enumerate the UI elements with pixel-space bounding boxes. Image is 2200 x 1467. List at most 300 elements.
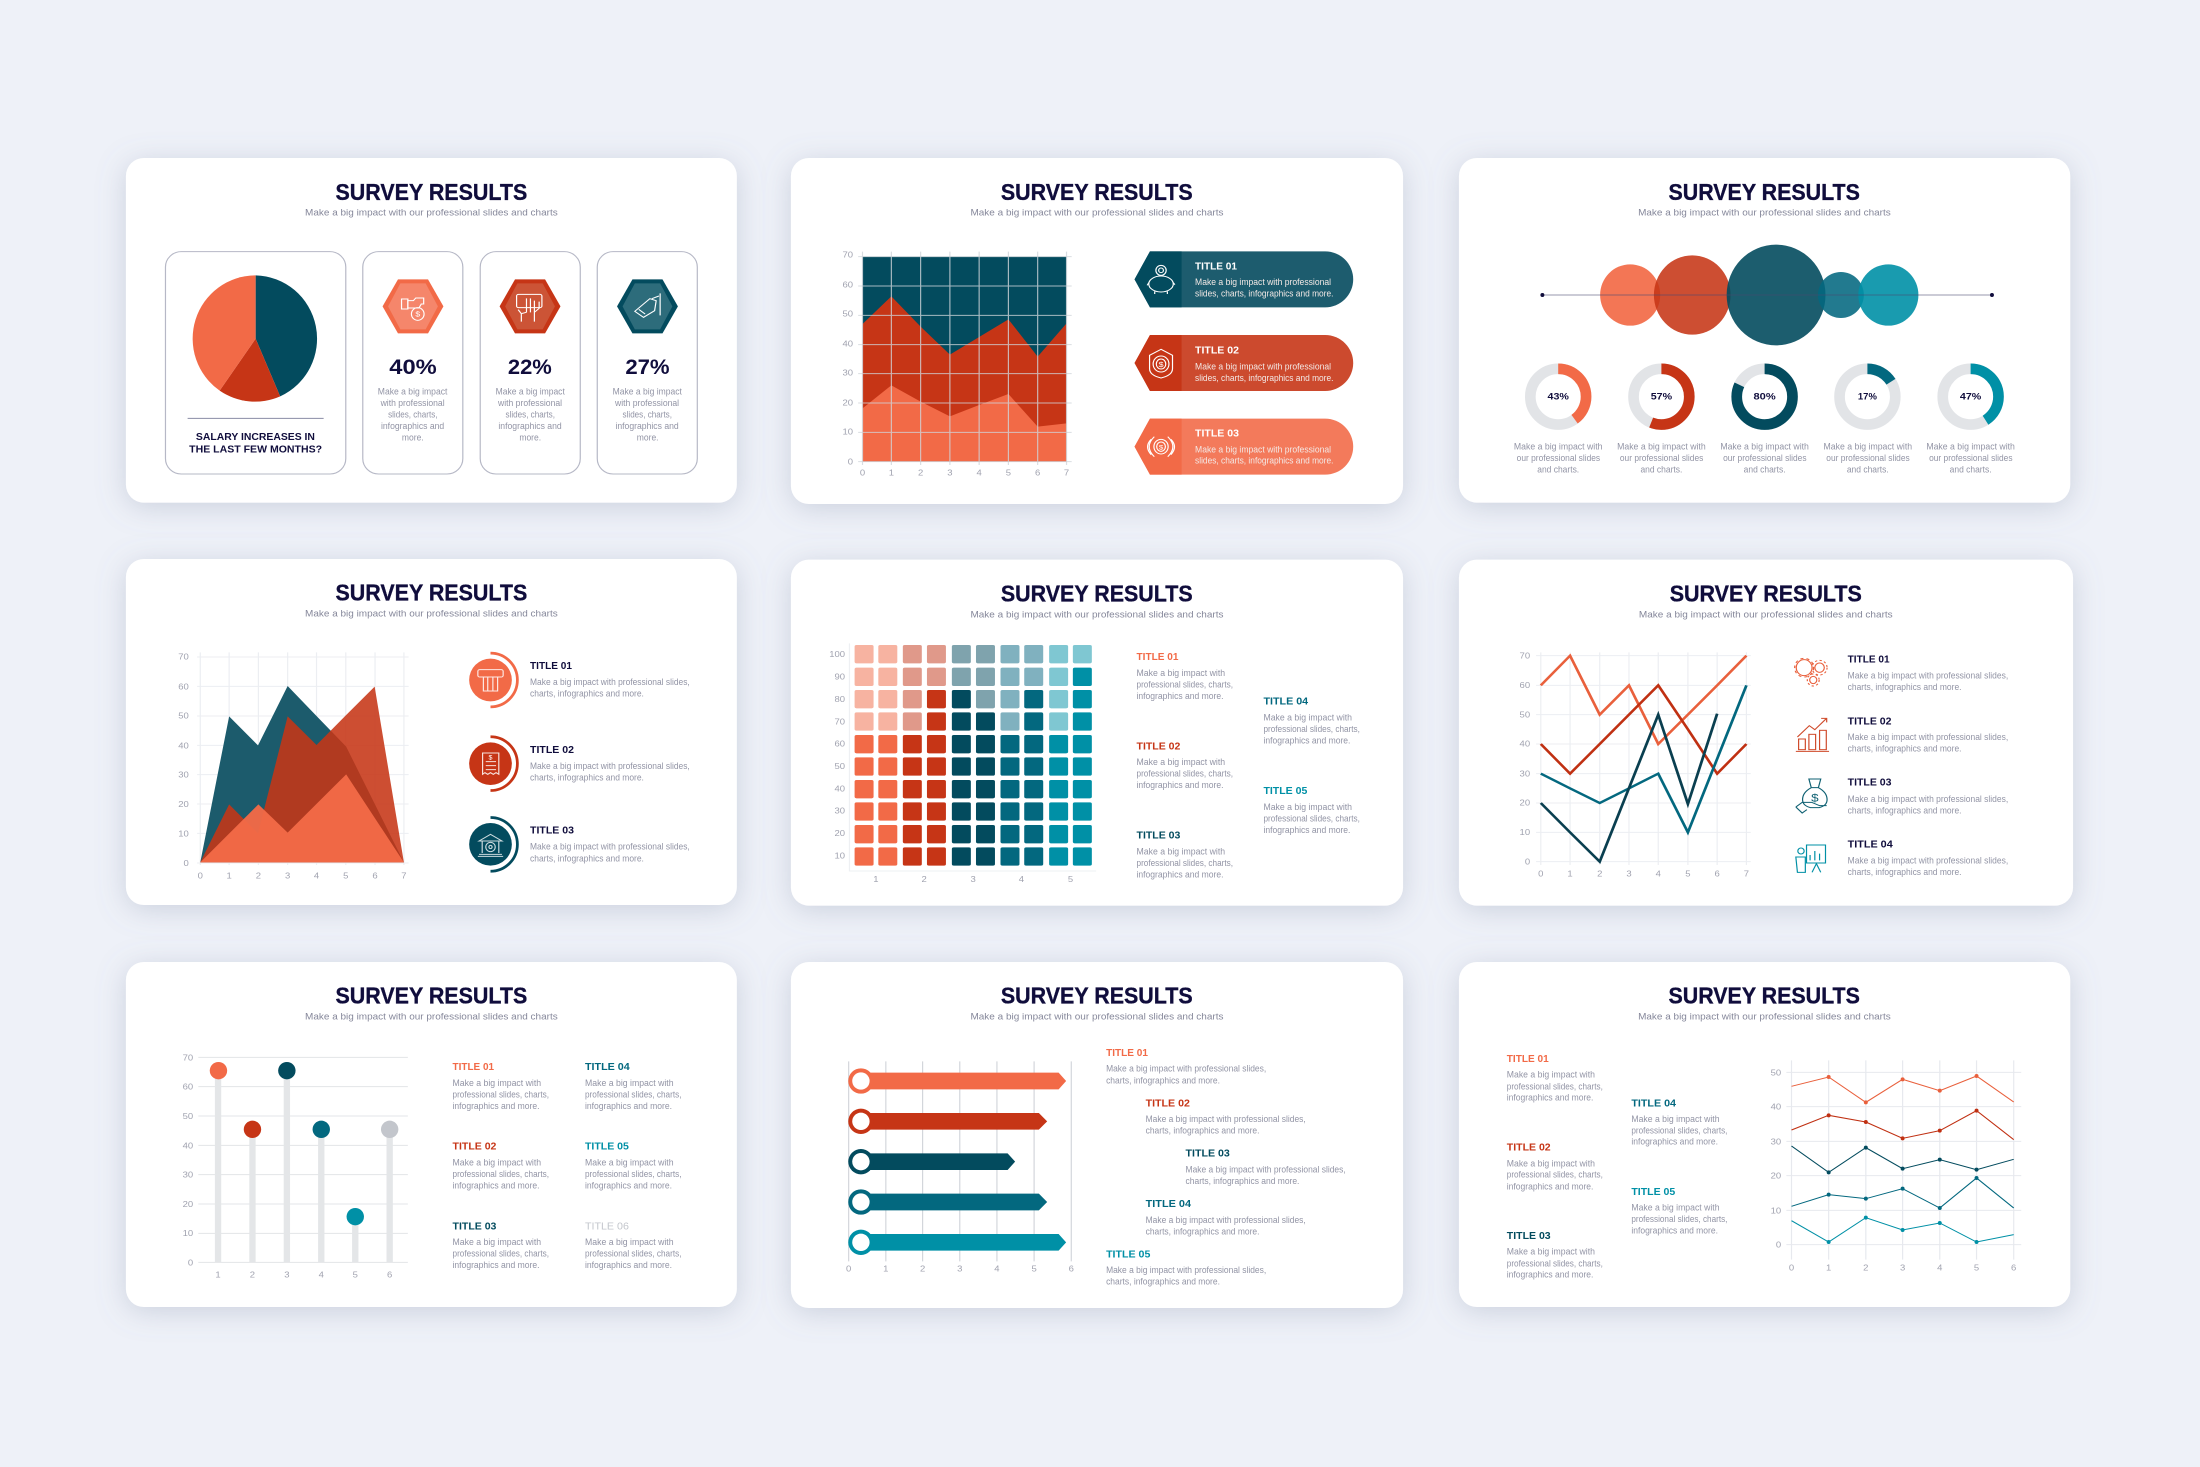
lollipop chart: 2 bbox=[250, 1270, 255, 1279]
text: title 03: Make a big impact with professional slides, bbox=[1186, 1165, 1346, 1175]
card background bbox=[791, 158, 1403, 504]
overlapping area chart: 6 bbox=[372, 871, 378, 880]
lollipop chart: 5 bbox=[353, 1270, 358, 1279]
stat card 22% bbox=[480, 252, 580, 474]
text: title 03 bbox=[453, 1221, 549, 1271]
text: title 05: professional slides, charts, bbox=[585, 1170, 681, 1180]
icon: shield with dollar bbox=[1150, 349, 1173, 378]
heatmap chart: 2 bbox=[922, 875, 927, 884]
arrow bar chart bbox=[846, 1061, 1074, 1273]
text: title 02: infographics and more. bbox=[1137, 781, 1224, 791]
text: title 02: infographics and more. bbox=[453, 1181, 540, 1191]
text: title 01: infographics and more. bbox=[1507, 1093, 1593, 1103]
text: title 05: infographics and more. bbox=[1263, 826, 1350, 836]
text: title 02: infographics and more. bbox=[1507, 1182, 1593, 1192]
text: title 03 bbox=[1186, 1148, 1346, 1187]
item: title 02: TITLE 02 bbox=[530, 745, 574, 756]
text: title 03: TITLE 03 bbox=[1186, 1148, 1230, 1159]
text: title 01: infographics and more. bbox=[453, 1102, 540, 1112]
text: title 02: Make a big impact with bbox=[453, 1158, 541, 1168]
icon: gears bbox=[1795, 658, 1827, 686]
item: title 02: $ bbox=[489, 755, 493, 761]
text: title 02: TITLE 02 bbox=[453, 1141, 496, 1152]
donut 47%: and charts. bbox=[1950, 465, 1992, 475]
icon: hand and card bbox=[500, 279, 560, 333]
heatmap chart: 100 bbox=[829, 650, 845, 659]
donut 57%: Make a big impact with bbox=[1617, 442, 1706, 452]
item: title 03: TITLE 03 bbox=[530, 825, 574, 836]
item: title 01: TITLE 01 bbox=[530, 661, 572, 672]
line chart with markers: 0 bbox=[1789, 1263, 1794, 1272]
line chart with markers: 4 bbox=[1937, 1263, 1943, 1272]
icon: hand and money bag: $ bbox=[415, 310, 421, 318]
pill: title 01: TITLE 01 bbox=[1195, 261, 1237, 272]
item: title 02 bbox=[1796, 716, 2008, 754]
subtitle: Make a big impact with our professional slides and charts bbox=[305, 208, 558, 218]
text: title 05: charts, infographics and more. bbox=[1106, 1277, 1220, 1287]
heatmap chart: 90 bbox=[835, 672, 845, 681]
card background bbox=[1459, 962, 2070, 1307]
text: title 01: TITLE 01 bbox=[1507, 1054, 1549, 1065]
text: title 03: infographics and more. bbox=[1507, 1270, 1593, 1280]
item: title 03: TITLE 03 bbox=[1848, 777, 1892, 788]
donut 47% bbox=[1926, 369, 2015, 475]
donut 57%: 57% bbox=[1651, 392, 1672, 402]
heatmap chart: 4 bbox=[1019, 875, 1024, 884]
text: title 06 bbox=[585, 1221, 681, 1271]
card background bbox=[126, 559, 737, 905]
overlapping area chart: 30 bbox=[178, 770, 189, 779]
text: title 04: TITLE 04 bbox=[585, 1062, 630, 1073]
line chart: 2 bbox=[1597, 869, 1602, 878]
item: title 04 bbox=[1796, 839, 2008, 878]
lollipop chart: 10 bbox=[183, 1229, 193, 1238]
item: title 01: charts, infographics and more. bbox=[530, 689, 644, 699]
heatmap chart: 10 bbox=[835, 851, 845, 860]
text: title 03: professional slides, charts, bbox=[453, 1249, 549, 1259]
item: title 02: Make a big impact with professional slides, bbox=[1848, 733, 2008, 743]
line chart: 1 bbox=[1567, 869, 1573, 878]
line chart: 6 bbox=[1715, 869, 1720, 878]
text: title 04: infographics and more. bbox=[585, 1102, 672, 1112]
stacked area chart: 40 bbox=[842, 339, 853, 348]
donut 43%: 43% bbox=[1548, 392, 1569, 402]
text: title 03: professional slides, charts, bbox=[1507, 1259, 1603, 1269]
text: title 01: infographics and more. bbox=[1137, 692, 1224, 702]
text: title 06: professional slides, charts, bbox=[585, 1249, 681, 1259]
text: title 01: professional slides, charts, bbox=[1507, 1082, 1603, 1092]
pill: title 02: $ bbox=[1159, 360, 1164, 369]
overlapping area chart bbox=[178, 652, 409, 880]
text: title 02: Make a big impact with professional slides, bbox=[1146, 1115, 1306, 1125]
text: title 01 bbox=[1507, 1054, 1603, 1103]
text: title 05 bbox=[1106, 1249, 1266, 1287]
text: title 02 bbox=[1146, 1098, 1306, 1136]
overlapping area chart: 60 bbox=[178, 682, 189, 691]
text: title 01: TITLE 01 bbox=[453, 1062, 494, 1073]
text: title 03: TITLE 03 bbox=[1137, 830, 1180, 841]
value: 22% bbox=[508, 355, 552, 379]
heading: SURVEY RESULTS bbox=[335, 983, 527, 1009]
line chart: 0 bbox=[1525, 857, 1530, 866]
lollipop chart: 3 bbox=[284, 1270, 290, 1279]
lollipop chart bbox=[183, 1053, 408, 1279]
line chart: 60 bbox=[1520, 681, 1530, 690]
text: title 04: TITLE 04 bbox=[1146, 1199, 1192, 1210]
pill: title 02: TITLE 02 bbox=[1195, 345, 1239, 356]
heading: SURVEY RESULTS bbox=[1669, 180, 1860, 205]
item: title 03: Make a big impact with professional slides, bbox=[530, 842, 690, 852]
lollipop chart: 70 bbox=[183, 1053, 193, 1062]
item: title 01 bbox=[1795, 654, 2008, 693]
overlapping area chart: 10 bbox=[178, 829, 189, 838]
item: title 03: Make a big impact with professional slides, bbox=[1848, 795, 2008, 805]
pie question: THE LAST FEW MONTHS? bbox=[189, 444, 322, 455]
pill: title 02 bbox=[1135, 335, 1353, 391]
item: title 02: Make a big impact with professional slides, bbox=[530, 762, 690, 772]
text: title 01 bbox=[453, 1062, 549, 1112]
line chart: 50 bbox=[1520, 710, 1530, 719]
subtitle: Make a big impact with our professional slides and charts bbox=[970, 610, 1224, 620]
text: title 01: Make a big impact with bbox=[1137, 669, 1225, 679]
donut 17% bbox=[1824, 369, 1912, 475]
pill: title 03: slides, charts, infographics and more. bbox=[1195, 456, 1333, 466]
text: title 01: TITLE 01 bbox=[1137, 652, 1178, 663]
item: title 01: Make a big impact with professional slides, bbox=[530, 678, 690, 688]
text: title 03 bbox=[1137, 830, 1233, 880]
arrow bar chart: 1 bbox=[883, 1264, 889, 1273]
panel: lollipop chart bbox=[126, 962, 737, 1307]
icon: piggy bank bbox=[1147, 265, 1175, 294]
text: title 03: TITLE 03 bbox=[453, 1221, 496, 1232]
line chart with markers: 40 bbox=[1771, 1102, 1781, 1111]
item: title 03: $ bbox=[1811, 792, 1819, 804]
stacked area chart: 60 bbox=[842, 280, 853, 289]
lollipop chart: 30 bbox=[183, 1170, 193, 1179]
line chart: 0 bbox=[1538, 869, 1544, 878]
line chart with markers: 50 bbox=[1771, 1068, 1781, 1077]
text: title 01: professional slides, charts, bbox=[453, 1090, 549, 1100]
subtitle: Make a big impact with our professional slides and charts bbox=[1638, 1012, 1891, 1022]
text: title 05: professional slides, charts, bbox=[1263, 814, 1360, 824]
pie chart bbox=[193, 275, 317, 402]
card background bbox=[791, 962, 1403, 1308]
item: title 03 bbox=[469, 817, 690, 871]
text: title 05: Make a big impact with professional slides, bbox=[1106, 1266, 1266, 1276]
line chart: 10 bbox=[1520, 828, 1530, 837]
lollipop chart: 50 bbox=[183, 1112, 193, 1121]
pill: title 03 bbox=[1135, 419, 1353, 475]
description: Make a big impact bbox=[613, 387, 682, 397]
panel: heatmap grid bbox=[791, 560, 1403, 906]
panel: thin line chart with markers bbox=[1459, 962, 2070, 1307]
icon: bank bbox=[478, 834, 503, 856]
heatmap chart: 3 bbox=[971, 875, 976, 884]
item: title 01: TITLE 01 bbox=[1848, 654, 1890, 665]
stacked area chart: 6 bbox=[1035, 468, 1040, 477]
line chart: 5 bbox=[1685, 869, 1691, 878]
text: title 02: charts, infographics and more. bbox=[1146, 1126, 1259, 1136]
line chart with markers: 5 bbox=[1974, 1263, 1979, 1272]
description: slides, charts, bbox=[506, 410, 555, 420]
arrow bar chart: 6 bbox=[1069, 1264, 1074, 1273]
line chart: 3 bbox=[1626, 869, 1632, 878]
text: title 02: professional slides, charts, bbox=[1137, 769, 1233, 779]
arrow bar chart: 3 bbox=[957, 1264, 963, 1273]
line chart with markers: 3 bbox=[1900, 1263, 1905, 1272]
text: title 03: Make a big impact with bbox=[453, 1238, 541, 1248]
description: Make a big impact bbox=[496, 387, 565, 397]
description: with professional bbox=[380, 399, 445, 409]
line chart with markers bbox=[1771, 1060, 2021, 1272]
heading: SURVEY RESULTS bbox=[1001, 180, 1193, 205]
subtitle: Make a big impact with our professional slides and charts bbox=[1638, 208, 1891, 218]
overlapping area chart: 5 bbox=[343, 871, 349, 880]
description: more. bbox=[402, 433, 424, 443]
overlapping area chart: 0 bbox=[184, 859, 189, 868]
item: title 03: charts, infographics and more. bbox=[1848, 806, 1962, 816]
stacked area chart bbox=[842, 250, 1072, 477]
text: title 01: Make a big impact with bbox=[1507, 1070, 1595, 1080]
text: title 05: Make a big impact with bbox=[1263, 803, 1352, 813]
text: title 05: Make a big impact with bbox=[585, 1158, 674, 1168]
icon: receipt bbox=[483, 753, 499, 774]
text: title 02: TITLE 02 bbox=[1137, 741, 1180, 752]
heatmap chart: 30 bbox=[835, 806, 845, 815]
line chart with markers: 30 bbox=[1771, 1137, 1781, 1146]
text: title 03: infographics and more. bbox=[1137, 870, 1224, 880]
text: title 05 bbox=[1263, 786, 1360, 836]
line chart: 7 bbox=[1744, 869, 1749, 878]
heatmap chart: 70 bbox=[835, 717, 845, 726]
pill: title 01: slides, charts, infographics and more. bbox=[1195, 289, 1333, 299]
donut 80%: 80% bbox=[1754, 392, 1776, 402]
item: title 02: TITLE 02 bbox=[1848, 716, 1892, 727]
stacked area chart: 30 bbox=[842, 368, 853, 377]
donut 43%: our professional slides bbox=[1517, 454, 1600, 464]
text: title 02 bbox=[1137, 741, 1233, 791]
text: title 03 bbox=[1507, 1231, 1603, 1280]
description: with professional bbox=[497, 399, 562, 409]
pie question bbox=[189, 432, 322, 455]
panel: pie chart and percentages bbox=[126, 158, 737, 503]
text: title 04: TITLE 04 bbox=[1631, 1098, 1677, 1109]
line chart with markers: 2 bbox=[1863, 1263, 1869, 1272]
stacked area chart: 50 bbox=[842, 309, 853, 318]
bubble timeline bbox=[1540, 245, 1994, 345]
card background bbox=[1459, 560, 2073, 906]
overlapping area chart: 7 bbox=[401, 871, 407, 880]
donut 80%: Make a big impact with bbox=[1720, 442, 1809, 452]
stacked area chart: 2 bbox=[918, 468, 923, 477]
text: title 03: TITLE 03 bbox=[1507, 1231, 1551, 1242]
heatmap chart: 80 bbox=[835, 695, 845, 704]
text: title 04: infographics and more. bbox=[1631, 1137, 1718, 1147]
item: title 02: charts, infographics and more. bbox=[1848, 744, 1962, 754]
text: title 01 bbox=[1137, 652, 1233, 702]
stacked area chart: 3 bbox=[947, 468, 953, 477]
text: title 05: TITLE 05 bbox=[1263, 786, 1307, 797]
pill: title 03: $ bbox=[1159, 443, 1163, 451]
donut 57% bbox=[1617, 369, 1706, 475]
text: title 02: Make a big impact with bbox=[1137, 758, 1225, 768]
text: title 06: TITLE 06 bbox=[585, 1221, 629, 1232]
text: title 05: TITLE 05 bbox=[1631, 1187, 1675, 1198]
pill: title 01 bbox=[1135, 251, 1353, 307]
lollipop chart: 6 bbox=[387, 1270, 392, 1279]
text: title 04 bbox=[1263, 696, 1360, 746]
donut 80% bbox=[1720, 369, 1809, 475]
donut 43% bbox=[1514, 369, 1603, 475]
pill: title 03: TITLE 03 bbox=[1195, 428, 1239, 439]
heading: SURVEY RESULTS bbox=[1670, 582, 1862, 607]
text: title 04: Make a big impact with bbox=[1631, 1115, 1720, 1125]
stacked area chart: 10 bbox=[842, 427, 853, 436]
heatmap chart: 60 bbox=[835, 739, 845, 748]
stacked area chart: 1 bbox=[889, 468, 894, 477]
stacked area chart: 0 bbox=[860, 468, 865, 477]
line chart: 30 bbox=[1520, 769, 1530, 778]
text: title 04: professional slides, charts, bbox=[1263, 725, 1360, 735]
arrow bar chart: 2 bbox=[920, 1264, 925, 1273]
text: title 05: infographics and more. bbox=[585, 1181, 672, 1191]
heading: SURVEY RESULTS bbox=[1669, 983, 1860, 1009]
donut 47%: our professional slides bbox=[1929, 454, 2013, 464]
text: title 04: TITLE 04 bbox=[1263, 696, 1309, 707]
pill: title 01: Make a big impact with professional bbox=[1195, 278, 1331, 288]
arrow bar chart: 5 bbox=[1031, 1264, 1037, 1273]
pill: title 02: Make a big impact with professional bbox=[1195, 362, 1331, 372]
text: title 02: professional slides, charts, bbox=[1507, 1170, 1603, 1180]
text: title 04: infographics and more. bbox=[1263, 736, 1350, 746]
description: infographics and bbox=[381, 422, 444, 432]
overlapping area chart: 20 bbox=[178, 800, 189, 809]
heading: SURVEY RESULTS bbox=[335, 581, 527, 606]
heatmap chart: 1 bbox=[873, 875, 879, 884]
text: title 05: professional slides, charts, bbox=[1631, 1215, 1727, 1225]
text: title 04: charts, infographics and more. bbox=[1146, 1227, 1259, 1237]
stat card 40% bbox=[363, 252, 463, 474]
text: title 03: infographics and more. bbox=[453, 1261, 540, 1271]
subtitle: Make a big impact with our professional slides and charts bbox=[305, 609, 558, 619]
pie card bbox=[165, 252, 346, 474]
lollipop chart: 0 bbox=[188, 1258, 193, 1267]
overlapping area chart: 1 bbox=[226, 871, 232, 880]
text: title 04: Make a big impact with bbox=[1263, 713, 1352, 723]
lollipop chart: 40 bbox=[183, 1141, 193, 1150]
overlapping area chart: 3 bbox=[285, 871, 290, 880]
text: title 03: Make a big impact with bbox=[1137, 847, 1225, 857]
text: title 04: professional slides, charts, bbox=[585, 1090, 681, 1100]
overlapping area chart: 2 bbox=[256, 871, 261, 880]
overlapping area chart: 40 bbox=[178, 741, 189, 750]
description: more. bbox=[637, 433, 659, 443]
card background bbox=[126, 962, 737, 1307]
card background bbox=[1459, 158, 2070, 503]
description: infographics and bbox=[615, 422, 679, 432]
lollipop chart: 20 bbox=[183, 1200, 193, 1209]
donut 47%: 47% bbox=[1960, 392, 1981, 402]
text: title 02: Make a big impact with bbox=[1507, 1159, 1595, 1169]
line chart with markers: 20 bbox=[1771, 1171, 1781, 1180]
stacked area chart: 70 bbox=[842, 250, 853, 259]
text: title 03: professional slides, charts, bbox=[1137, 859, 1233, 869]
icon: hand holding card bbox=[617, 279, 678, 333]
description: slides, charts, bbox=[623, 410, 672, 420]
pill: title 02: slides, charts, infographics and more. bbox=[1195, 374, 1333, 384]
heatmap chart bbox=[829, 643, 1096, 884]
panel: stacked area chart and pills bbox=[791, 158, 1403, 504]
text: title 04 bbox=[585, 1062, 681, 1112]
description: with professional bbox=[614, 399, 679, 409]
description: more. bbox=[519, 433, 541, 443]
value: 27% bbox=[625, 355, 670, 379]
text: title 04: Make a big impact with professional slides, bbox=[1146, 1216, 1306, 1226]
stacked area chart: 0 bbox=[848, 457, 853, 466]
line chart with markers: 6 bbox=[2011, 1263, 2016, 1272]
description: infographics and bbox=[498, 422, 562, 432]
stacked area chart: 20 bbox=[842, 398, 853, 407]
line chart bbox=[1520, 651, 1751, 878]
line chart with markers: 1 bbox=[1826, 1263, 1831, 1272]
text: title 05 bbox=[1631, 1187, 1727, 1236]
lollipop chart: 60 bbox=[183, 1082, 193, 1091]
item: title 01: Make a big impact with professional slides, bbox=[1848, 671, 2008, 681]
donut 17%: Make a big impact with bbox=[1824, 442, 1912, 452]
stacked area chart: 4 bbox=[977, 468, 982, 477]
line chart with markers: 0 bbox=[1776, 1240, 1781, 1249]
icon: presenter with board bbox=[1796, 845, 1825, 872]
lollipop chart: 4 bbox=[319, 1270, 324, 1279]
arrow bar chart: 4 bbox=[994, 1264, 1000, 1273]
panel: overlapping area chart bbox=[126, 559, 737, 905]
subtitle: Make a big impact with our professional slides and charts bbox=[970, 208, 1224, 218]
text: title 04 bbox=[1146, 1199, 1306, 1237]
heatmap chart: 40 bbox=[835, 784, 845, 793]
heading: SURVEY RESULTS bbox=[335, 180, 527, 205]
item: title 01 bbox=[469, 653, 690, 707]
overlapping area chart: 4 bbox=[314, 871, 319, 880]
text: title 01: professional slides, charts, bbox=[1137, 680, 1233, 690]
text: title 02: TITLE 02 bbox=[1507, 1142, 1551, 1153]
text: title 04 bbox=[1631, 1098, 1727, 1147]
value: 40% bbox=[389, 355, 437, 379]
line chart with markers: 10 bbox=[1771, 1206, 1781, 1215]
description bbox=[496, 387, 565, 443]
lollipop chart: 1 bbox=[215, 1270, 221, 1279]
item: title 02 bbox=[469, 737, 690, 791]
text: title 04: Make a big impact with bbox=[585, 1079, 674, 1089]
text: title 04: professional slides, charts, bbox=[1631, 1126, 1727, 1136]
heatmap chart: 5 bbox=[1068, 875, 1073, 884]
item: title 03 bbox=[1796, 777, 2008, 816]
stacked area chart: 5 bbox=[1006, 468, 1011, 477]
donut 17%: 17% bbox=[1858, 392, 1877, 402]
donut 80%: our professional slides bbox=[1723, 454, 1807, 464]
pill: title 03: Make a big impact with professional bbox=[1195, 445, 1331, 455]
donut 17%: and charts. bbox=[1847, 465, 1889, 475]
description bbox=[378, 387, 448, 443]
heading: SURVEY RESULTS bbox=[1001, 582, 1193, 607]
heatmap chart: 50 bbox=[835, 762, 845, 771]
text: title 01: Make a big impact with professional slides, bbox=[1106, 1064, 1266, 1074]
stacked area chart: 7 bbox=[1064, 468, 1069, 477]
item: title 04: TITLE 04 bbox=[1848, 839, 1893, 850]
icon: money bag bbox=[1796, 779, 1827, 813]
line chart: 70 bbox=[1520, 651, 1530, 660]
description bbox=[613, 387, 682, 443]
line chart: 40 bbox=[1520, 739, 1530, 748]
